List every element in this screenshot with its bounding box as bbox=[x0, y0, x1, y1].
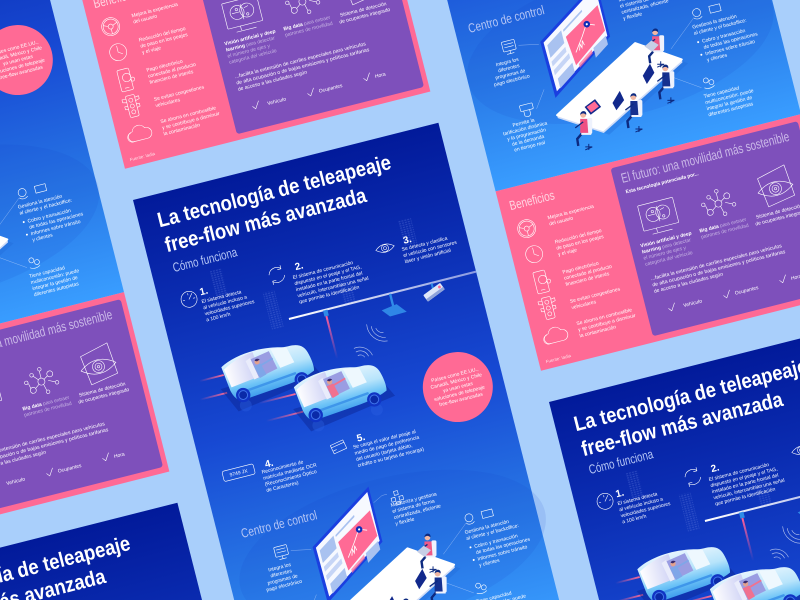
control centre: multiconcesión: puede bbox=[705, 88, 755, 106]
panel: el futuro: learning para detectar bbox=[641, 237, 692, 256]
bottom panels and icons bbox=[496, 114, 800, 371]
panel: beneficios: de paso en los peajes bbox=[556, 234, 605, 252]
control centre: al cliente y el backoffice: bbox=[693, 18, 747, 37]
poster: upper right bbox=[370, 0, 800, 371]
control centre: Gestiona la atención bbox=[692, 14, 738, 31]
panel: el futuro: Vehículo bbox=[6, 476, 26, 487]
control centre: Gestiona la atención bbox=[17, 194, 63, 211]
step 4: matrícula mediante OCR bbox=[263, 462, 318, 482]
panel: beneficios: Se evitan congestiones bbox=[153, 84, 205, 103]
step 5: del usuario (tarjeta débito, bbox=[356, 443, 413, 463]
control centre: y flexible bbox=[395, 516, 415, 527]
panel: beneficios: Pago electrónico bbox=[146, 59, 184, 74]
control centre: Tiene capacidad bbox=[29, 265, 66, 280]
control centre: programas de bbox=[495, 68, 526, 81]
step 2: 2. bbox=[710, 462, 721, 475]
control centre: programas de bbox=[267, 573, 299, 587]
control centre: de todas las operaciones bbox=[475, 536, 531, 556]
control centre: Permite la bbox=[512, 117, 536, 129]
panel: el futuro: ...facilita la extensión de carriles especiales para vehículos bbox=[650, 243, 783, 282]
control centre: diferentes bbox=[270, 568, 293, 579]
control centre: y la programación bbox=[507, 127, 547, 143]
control centre bbox=[450, 0, 796, 175]
control centre: Integra los bbox=[495, 57, 520, 68]
panel: el futuro: ...facilita la extensión de carriles especiales para vehículos bbox=[234, 41, 367, 80]
step 3 bbox=[399, 223, 460, 265]
step 1: velocidades superiores bbox=[620, 501, 672, 519]
step 2: El sistema de comunicación bbox=[292, 260, 354, 281]
poster: main centre bbox=[133, 121, 572, 600]
panel: beneficios: vehiculares bbox=[571, 299, 597, 311]
panel: beneficios: y se contribuye a disminuir bbox=[161, 111, 221, 131]
poster background bbox=[0, 0, 124, 369]
poster: lower right bbox=[549, 325, 800, 600]
control centre: Monitoriza y gestiona bbox=[390, 491, 438, 509]
control centre: integrar la gestión de bbox=[32, 275, 79, 292]
panel: el futuro: learning para detectar bbox=[225, 35, 276, 54]
panel: beneficios: vehiculares bbox=[155, 97, 181, 109]
step 4: (Reconocimiento Óptico bbox=[264, 468, 318, 488]
panel: beneficios: Mejora la experiencia bbox=[131, 2, 179, 19]
control centre: Informes sobre tránsito bbox=[477, 544, 528, 563]
step 4: de Caracteres) bbox=[266, 480, 300, 494]
callout: countries: ya usan estas bbox=[442, 381, 474, 394]
panel: el futuro: de ocupantes integrado bbox=[339, 7, 391, 26]
panel: el futuro: el número de ejes y bbox=[227, 43, 271, 60]
panel: beneficios: Se evitan congestiones bbox=[569, 286, 621, 305]
panel: beneficios: y se contribuye a disminuir bbox=[577, 313, 637, 333]
panel: el futuro: categoría del vehículo bbox=[644, 250, 694, 268]
panel: el futuro bbox=[0, 307, 147, 495]
panel: beneficios bbox=[89, 0, 226, 162]
panel: beneficios: del usuario bbox=[133, 14, 158, 25]
panel: beneficios bbox=[505, 175, 642, 364]
panel: beneficios: conectado al producto bbox=[563, 264, 613, 282]
control centre bbox=[0, 116, 122, 355]
panel: el futuro: Visión artificial y deep bbox=[224, 29, 276, 47]
panel: el futuro: de ocupantes integrado bbox=[78, 387, 130, 406]
panel: el futuro: patrones de movilidad bbox=[285, 21, 334, 39]
step 2 bbox=[289, 246, 371, 305]
step 5: medio de pago de preferencia bbox=[354, 435, 420, 457]
step 4 bbox=[222, 448, 321, 503]
poster background bbox=[0, 503, 303, 600]
control centre: pago electrónico bbox=[493, 73, 531, 88]
panel: el futuro: Hora bbox=[113, 451, 126, 460]
step 3: el vehículo con sensores bbox=[403, 240, 458, 259]
panel: el futuro bbox=[203, 0, 408, 115]
panel: beneficios: Se ahorra en combustible bbox=[576, 307, 633, 327]
control centre: Informes sobre tránsito bbox=[30, 219, 81, 237]
control centre: Centro de control bbox=[239, 507, 319, 541]
step 1: El sistema detecta bbox=[617, 491, 658, 507]
poster background bbox=[549, 325, 800, 600]
panel: beneficios: y el viaje bbox=[141, 45, 162, 56]
step 4: 4. bbox=[264, 458, 275, 471]
title: free-flow más avanzada bbox=[162, 184, 369, 257]
step 2: 2. bbox=[294, 260, 305, 273]
control centre: y flexible bbox=[622, 11, 643, 22]
step 1: 1. bbox=[614, 488, 625, 500]
step 5: 5. bbox=[356, 432, 367, 445]
control centre: tarificación dinámica bbox=[503, 120, 548, 137]
step 2: El sistema de comunicación bbox=[708, 462, 770, 483]
control centre: multiconcesión: puede bbox=[30, 268, 80, 286]
control centre: de la demanda bbox=[511, 134, 545, 148]
control centre: integrar la gestión de bbox=[706, 95, 753, 112]
step 2: vehículo, intercambian una señal bbox=[297, 276, 369, 299]
step 4: 9749 JX bbox=[229, 468, 249, 479]
control centre: Cobro y transacción bbox=[474, 533, 519, 550]
control centre: el sistema de forma bbox=[392, 498, 436, 515]
control centre: Tiene capacidad bbox=[703, 85, 740, 100]
panel: beneficios: Fuente: Iadia bbox=[129, 151, 156, 162]
control centre: en tiempo real bbox=[514, 140, 546, 154]
panel: el futuro: Big data para extraer bbox=[22, 395, 70, 412]
control centre: de todas las operaciones bbox=[29, 211, 84, 231]
step 1: velocidades superiores bbox=[204, 299, 256, 317]
step 2: vehículo, intercambian una señal bbox=[713, 478, 785, 501]
poster background bbox=[133, 123, 564, 600]
panel: el futuro: Esta tecnología potenciada por... bbox=[625, 171, 700, 195]
callout: countries bbox=[415, 345, 500, 430]
step 2: instalado en la parte frontal del bbox=[295, 271, 363, 293]
callout: countries: free-flow avanzadas bbox=[439, 391, 484, 408]
panel: el futuro: Sistema de detección bbox=[339, 1, 387, 19]
step 1: al vehículo incluso a bbox=[203, 294, 248, 311]
step 2: dispuesto en el peaje y el TAG, bbox=[710, 466, 778, 489]
panel: el futuro: de acceso a las ciudades según bbox=[653, 271, 724, 295]
panel: beneficios: de paso en los peajes bbox=[140, 32, 189, 50]
panel: el futuro: Ocupantes bbox=[734, 285, 760, 297]
control centre: pago electrónico bbox=[266, 579, 303, 594]
toll gantry, cars and step icons bbox=[585, 407, 800, 600]
callout: countries: soluciones de telepeaje bbox=[433, 384, 486, 403]
panel: beneficios: Beneficios bbox=[508, 187, 556, 213]
poster: upper centre column, benefits and future bbox=[80, 0, 430, 169]
title: La tecnología de teleapeaje bbox=[155, 151, 393, 232]
panel: el futuro: Vehículo bbox=[683, 298, 703, 309]
panel: el futuro: el número de ejes y bbox=[643, 245, 687, 262]
panel: el futuro: Big data para extraer bbox=[699, 217, 747, 234]
step 4: Reconocimiento de bbox=[261, 459, 304, 476]
step 1 bbox=[614, 477, 673, 525]
control centre: al cliente y el backoffice: bbox=[19, 198, 73, 217]
poster background bbox=[370, 0, 800, 191]
panel: el futuro bbox=[619, 129, 800, 317]
control centre: y clientes bbox=[706, 52, 728, 63]
step 2: que permite la identificación bbox=[299, 284, 360, 305]
panel: el futuro: de alta ocupación o de bajas emisiones y políticas tarifarias bbox=[236, 47, 371, 86]
control centre: diferentes bbox=[498, 63, 521, 74]
step 2: que permite la identificación bbox=[715, 486, 776, 507]
panel: beneficios: Fuente: Iadia bbox=[545, 353, 572, 364]
control centre: Cobro y transacción bbox=[27, 208, 72, 225]
panel: beneficios: Pago electrónico bbox=[562, 261, 600, 276]
panel: beneficios: y el viaje bbox=[557, 247, 578, 258]
panel: el futuro: Visión artificial y deep bbox=[640, 231, 692, 249]
panel: el futuro: categoría del vehículo bbox=[228, 48, 278, 66]
step 3: Se detecta y clasifica bbox=[401, 236, 448, 253]
step 2: instalado en la parte frontal del bbox=[711, 473, 779, 495]
step 1: a 100 km/h bbox=[622, 514, 647, 525]
panel: beneficios: Reducción del tiempo bbox=[554, 228, 603, 246]
poster: lower left, title only bbox=[0, 503, 303, 600]
panel: el futuro: Ocupantes bbox=[57, 463, 83, 475]
control centre: diferentes autopistas bbox=[33, 281, 80, 298]
callout: countries: ya usan estas bbox=[2, 54, 34, 67]
panel: el futuro: patrones de movilidad bbox=[24, 401, 73, 419]
control centre: de todas las operaciones bbox=[703, 31, 759, 51]
toll gantry, cars and step icons bbox=[169, 205, 511, 483]
step 5: Se carga el valor del peaje al bbox=[352, 429, 416, 451]
poster: left column bbox=[0, 0, 170, 549]
poster background and icons bbox=[80, 0, 430, 169]
heading: como funciona: Cómo funciona bbox=[171, 244, 239, 275]
control centre: Integra los bbox=[268, 562, 292, 574]
panel: el futuro: Ocupantes bbox=[318, 83, 344, 95]
heading: como funciona: Cómo funciona bbox=[587, 446, 655, 477]
step 1: al vehículo incluso a bbox=[619, 496, 664, 513]
control centre: Cobro y transacción bbox=[701, 28, 746, 45]
step 1: 1. bbox=[198, 286, 209, 298]
panel: el futuro: de alta ocupación o de bajas emisiones y políticas tarifarias bbox=[652, 249, 787, 288]
control centre: diferentes autopistas bbox=[708, 101, 754, 118]
control centre bbox=[223, 441, 568, 600]
control centre: y clientes bbox=[32, 232, 54, 243]
panel: el futuro: patrones de movilidad bbox=[701, 223, 750, 241]
panel: beneficios: Reducción del tiempo bbox=[138, 26, 187, 44]
step 5: crédito o su tarjeta de recarga) bbox=[357, 446, 425, 469]
control centre: al cliente y el backoffice: bbox=[466, 523, 520, 542]
panel: beneficios: la contaminación bbox=[579, 324, 617, 339]
step 1: a 100 km/h bbox=[206, 312, 231, 323]
step 2 bbox=[705, 448, 787, 507]
control centre: Gestiona la atención bbox=[464, 519, 510, 536]
step 1 bbox=[198, 275, 257, 323]
step 3: 3. bbox=[402, 234, 413, 247]
panel: beneficios: la contaminación bbox=[163, 122, 201, 137]
control centre: Informes sobre tránsito bbox=[705, 39, 756, 57]
bottom panels and icons bbox=[0, 292, 169, 549]
panel: el futuro: Big data para extraer bbox=[283, 15, 331, 32]
step 1: El sistema detecta bbox=[201, 289, 242, 305]
panel: beneficios: del usuario bbox=[549, 216, 574, 227]
callout: countries bbox=[0, 18, 60, 103]
panel: beneficios: Mejora la experiencia bbox=[547, 204, 595, 221]
step 2: dispuesto en el peaje y el TAG, bbox=[294, 264, 362, 287]
panel: beneficios: financiero de interés bbox=[565, 271, 611, 288]
panel: el futuro: de acceso a las ciudades según bbox=[237, 69, 308, 93]
step 3: láser y visión artificial bbox=[404, 248, 452, 265]
control centre: y clientes bbox=[479, 558, 501, 569]
panel: el futuro: Hora bbox=[374, 71, 387, 80]
callout: countries: Canadá, México y Chile bbox=[430, 372, 483, 391]
control centre: centralizada, eficiente bbox=[393, 503, 442, 521]
panel: beneficios: conectado al producto bbox=[147, 62, 197, 80]
panel: beneficios: financiero de interés bbox=[149, 69, 195, 86]
step 5 bbox=[350, 419, 425, 469]
panel: beneficios: Se ahorra en combustible bbox=[160, 105, 217, 125]
callout: countries: Países como EE.UU., bbox=[431, 367, 479, 384]
panel: el futuro: Sistema de detección bbox=[78, 381, 126, 399]
panel: el futuro: Vehículo bbox=[267, 96, 287, 107]
